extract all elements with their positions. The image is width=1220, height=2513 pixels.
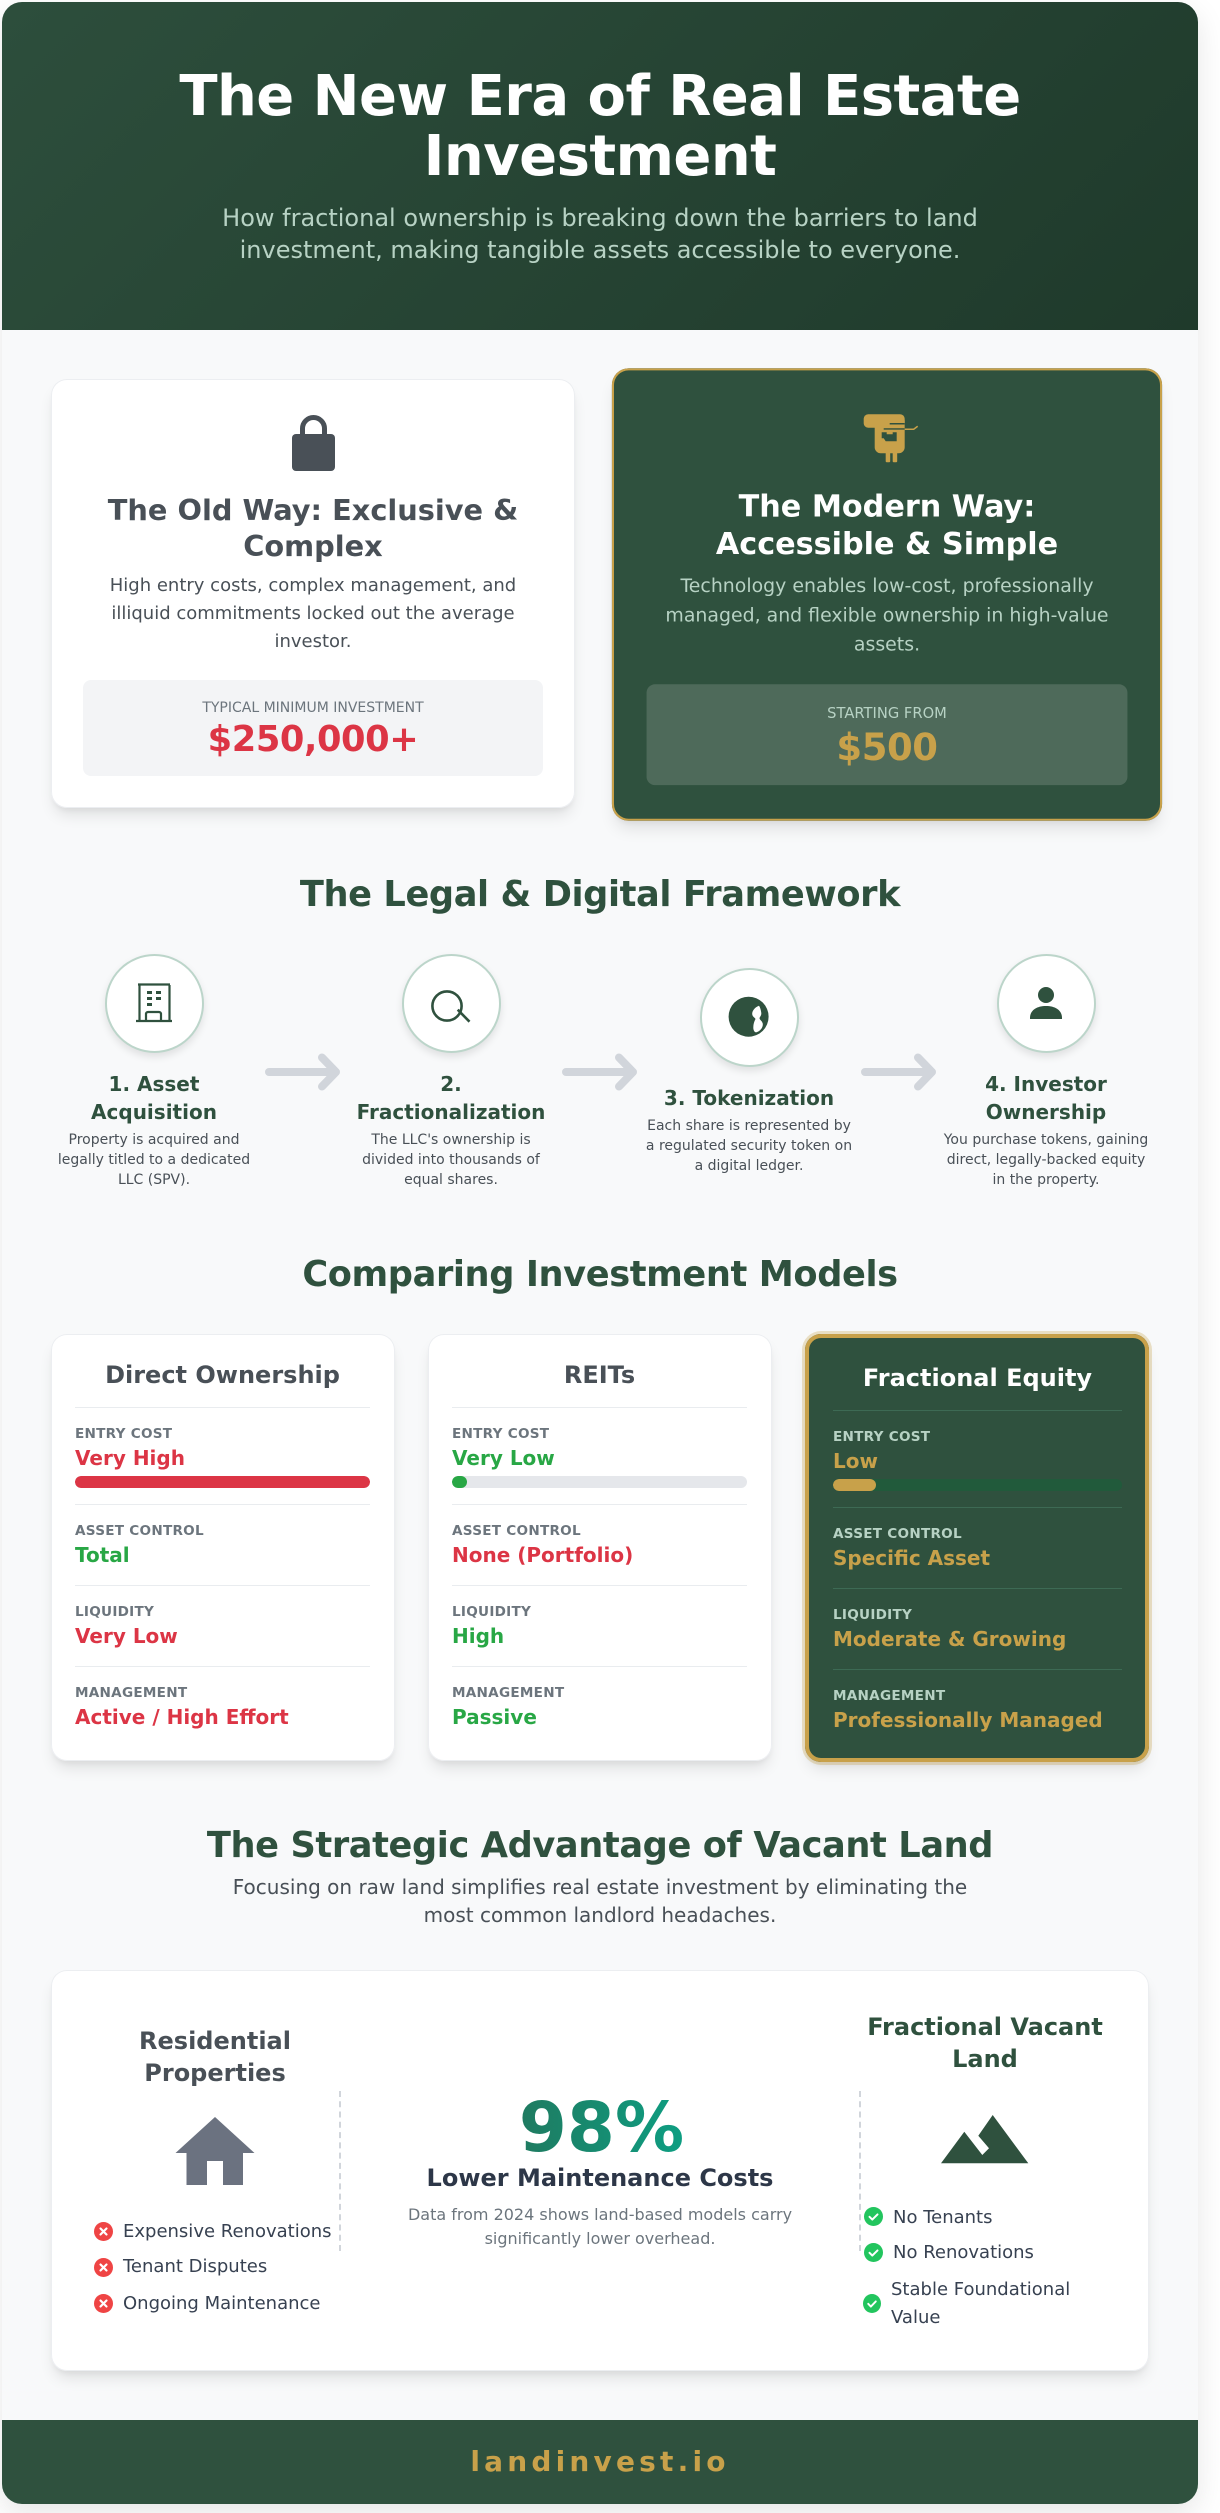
- panel: direct ownership: [51, 1334, 394, 1761]
- icon: magnifier: [402, 954, 500, 1052]
- column content: [75, 1361, 370, 1729]
- heading: modern way: The Modern Way:: [739, 487, 1035, 523]
- description: modern way: Technology enables low-cost, professionally: [680, 575, 1094, 597]
- item: no renovations: No Renovations: [893, 2242, 1034, 2263]
- step description: a digital ledger.: [695, 1158, 803, 1174]
- intro text: strategic advantage: Focusing on raw land simplifies real estate investment by eliminating the: [233, 1875, 967, 1899]
- step title: [91, 1072, 217, 1124]
- step 4: investor ownership: [944, 954, 1148, 1188]
- subtitle: investment, making tangible assets accessible to everyone.: [240, 236, 960, 264]
- title: [179, 64, 1021, 189]
- step 2: fractionalization: [357, 954, 545, 1188]
- footer brand: landinvest.io: [470, 2445, 730, 2478]
- column title: REITs: [564, 1361, 635, 1389]
- label: asset control: ASSET CONTROL: [452, 1523, 581, 1539]
- title: The New Era of Real Estate: [179, 64, 1021, 129]
- description: old way: High entry costs, complex management, and: [110, 575, 516, 596]
- item: ongoing maintenance: Ongoing Maintenance: [123, 2292, 320, 2314]
- value: entry cost: Very Low: [452, 1446, 555, 1470]
- step description: in the property.: [992, 1172, 1100, 1188]
- icon: mountains: [941, 2115, 1028, 2164]
- description: modern way: managed, and flexible ownership in high-value: [665, 604, 1109, 626]
- bar: entry cost: [452, 1476, 747, 1488]
- step description: Each share is represented by: [647, 1118, 851, 1134]
- arrow: step 1 to 2: [265, 1054, 340, 1090]
- label: liquidity: LIQUIDITY: [833, 1607, 912, 1623]
- description: old way: [110, 575, 516, 652]
- item: stable foundational value: Stable Foundational: [891, 2278, 1070, 2300]
- description: modern way: assets.: [854, 634, 920, 656]
- label: management: MANAGEMENT: [833, 1688, 945, 1704]
- label: asset control: ASSET CONTROL: [833, 1526, 962, 1542]
- label: entry cost: ENTRY COST: [833, 1429, 930, 1445]
- bar: entry cost: [75, 1476, 370, 1488]
- heading: modern way: Accessible & Simple: [716, 525, 1058, 561]
- icon: globe token: [700, 968, 798, 1066]
- subtitle: How fractional ownership is breaking down the barriers to land: [222, 204, 978, 232]
- step description: equal shares.: [404, 1172, 498, 1188]
- step title: [357, 1072, 545, 1124]
- panel: the modern way: [612, 368, 1162, 821]
- step title: 3. Tokenization: [664, 1086, 834, 1110]
- item: expensive renovations: Expensive Renovations: [123, 2221, 332, 2242]
- icon: building: [104, 954, 204, 1052]
- header banner: [2, 2, 1198, 330]
- subtitle: [222, 204, 978, 264]
- footer bar: [2, 2420, 1198, 2504]
- description: old way: investor.: [274, 631, 352, 652]
- column title: Fractional Equity: [863, 1364, 1092, 1392]
- heading: residential properties: [139, 2027, 291, 2087]
- heading: modern way: [716, 487, 1058, 561]
- value: minimum investment: $250,000+: [208, 719, 418, 760]
- item: stable foundational value: Value: [891, 2306, 940, 2328]
- panel: REITs: [428, 1334, 772, 1761]
- heading: fractional vacant land: Land: [952, 2045, 1018, 2073]
- value: management: Active / High Effort: [75, 1705, 289, 1729]
- value: entry cost: Low: [833, 1449, 878, 1473]
- text: data note: Data from 2024 shows land-based models carry: [408, 2205, 792, 2224]
- value: liquidity: Very Low: [75, 1624, 178, 1648]
- heading: old way: [108, 493, 518, 563]
- step description: [58, 1132, 250, 1188]
- list: vacant land benefits: [863, 2207, 1070, 2328]
- step description: [646, 1118, 852, 1174]
- heading: legal and digital framework: The Legal & Digital Framework: [300, 874, 900, 915]
- value: entry cost: Very High: [75, 1446, 185, 1470]
- intro text: strategic advantage: most common landlord headaches.: [424, 1903, 776, 1927]
- step title: [985, 1072, 1107, 1124]
- label: typical minimum investment: TYPICAL MINIMUM INVESTMENT: [202, 700, 424, 716]
- step description: The LLC's ownership is: [371, 1132, 531, 1148]
- heading: residential properties: Residential: [139, 2027, 291, 2055]
- heading: fractional vacant land: Fractional Vacant: [867, 2013, 1103, 2041]
- value: asset control: None (Portfolio): [452, 1543, 633, 1567]
- item: tenant disputes: Tenant Disputes: [123, 2256, 267, 2277]
- heading: strategic advantage of vacant land: The Strategic Advantage of Vacant Land: [207, 1824, 993, 1866]
- step description: direct, legally-backed equity: [947, 1152, 1145, 1168]
- heading: old way: Complex: [243, 529, 383, 563]
- panel: the old way: [51, 379, 575, 808]
- label: entry cost: ENTRY COST: [75, 1426, 172, 1442]
- step title: Fractionalization: [357, 1100, 545, 1124]
- text: data note: significantly lower overhead.: [485, 2229, 715, 2248]
- price box: modern way: [647, 684, 1127, 785]
- heading: residential properties: Properties: [144, 2059, 286, 2087]
- label: entry cost: ENTRY COST: [452, 1426, 549, 1442]
- step title: 4. Investor: [985, 1072, 1107, 1096]
- icon: lock: [292, 415, 335, 471]
- step description: [362, 1132, 540, 1188]
- step title: Acquisition: [91, 1100, 217, 1124]
- item: no tenants: No Tenants: [893, 2207, 992, 2228]
- description: modern way: [665, 575, 1109, 656]
- step description: You purchase tokens, gaining: [944, 1132, 1148, 1148]
- step description: Property is acquired and: [68, 1132, 240, 1148]
- bar: entry cost: [833, 1479, 1122, 1491]
- panel: vacant land comparison: [51, 1970, 1149, 2371]
- heading: old way: The Old Way: Exclusive &: [108, 493, 518, 527]
- value: asset control: Total: [75, 1543, 130, 1567]
- icon: house: [176, 2117, 254, 2185]
- panel: fractional equity: [805, 1334, 1149, 1762]
- value: management: Passive: [452, 1705, 537, 1729]
- price box: old way: [83, 680, 543, 776]
- step description: legally titled to a dedicated: [58, 1152, 250, 1168]
- icon: plug: [864, 414, 918, 462]
- step description: a regulated security token on: [646, 1138, 852, 1154]
- label: management: MANAGEMENT: [452, 1685, 564, 1701]
- value: asset control: Specific Asset: [833, 1546, 990, 1570]
- icon: person: [996, 954, 1096, 1052]
- label: liquidity: LIQUIDITY: [452, 1604, 531, 1620]
- heading: comparing investment models: Comparing Investment Models: [302, 1254, 898, 1295]
- step 3: tokenization: [646, 968, 852, 1174]
- heading: fractional vacant land: [867, 2013, 1103, 2073]
- arrow: step 2 to 3: [562, 1054, 637, 1090]
- column title: Direct Ownership: [105, 1361, 340, 1389]
- value: management: Professionally Managed: [833, 1708, 1103, 1732]
- column content: [833, 1364, 1122, 1732]
- title: Investment: [424, 124, 776, 189]
- step description: LLC (SPV).: [118, 1172, 190, 1188]
- arrow: step 3 to 4: [861, 1054, 936, 1090]
- description: old way: illiquid commitments locked out the average: [111, 603, 515, 624]
- label: asset control: ASSET CONTROL: [75, 1523, 204, 1539]
- step description: [944, 1132, 1148, 1188]
- step 1: asset acquisition: [58, 954, 250, 1188]
- column content: [452, 1361, 747, 1729]
- value: liquidity: Moderate & Growing: [833, 1627, 1066, 1651]
- label: liquidity: LIQUIDITY: [75, 1604, 154, 1620]
- statistic: 98 percent: 98%: [519, 2088, 684, 2168]
- list: residential drawbacks: [94, 2221, 332, 2314]
- step title: Ownership: [986, 1100, 1106, 1124]
- heading: lower maintenance costs: Lower Maintenance Costs: [427, 2164, 773, 2192]
- label: management: MANAGEMENT: [75, 1685, 187, 1701]
- step description: divided into thousands of: [362, 1152, 540, 1168]
- value: liquidity: High: [452, 1624, 504, 1648]
- step title: 2.: [440, 1072, 462, 1096]
- intro text: strategic advantage: [233, 1875, 967, 1927]
- step title: 1. Asset: [109, 1072, 199, 1096]
- item: stable foundational value: [863, 2278, 1070, 2328]
- text: data note: [408, 2205, 792, 2248]
- value: starting price: $500: [836, 726, 938, 769]
- label: starting from: STARTING FROM: [827, 705, 947, 722]
